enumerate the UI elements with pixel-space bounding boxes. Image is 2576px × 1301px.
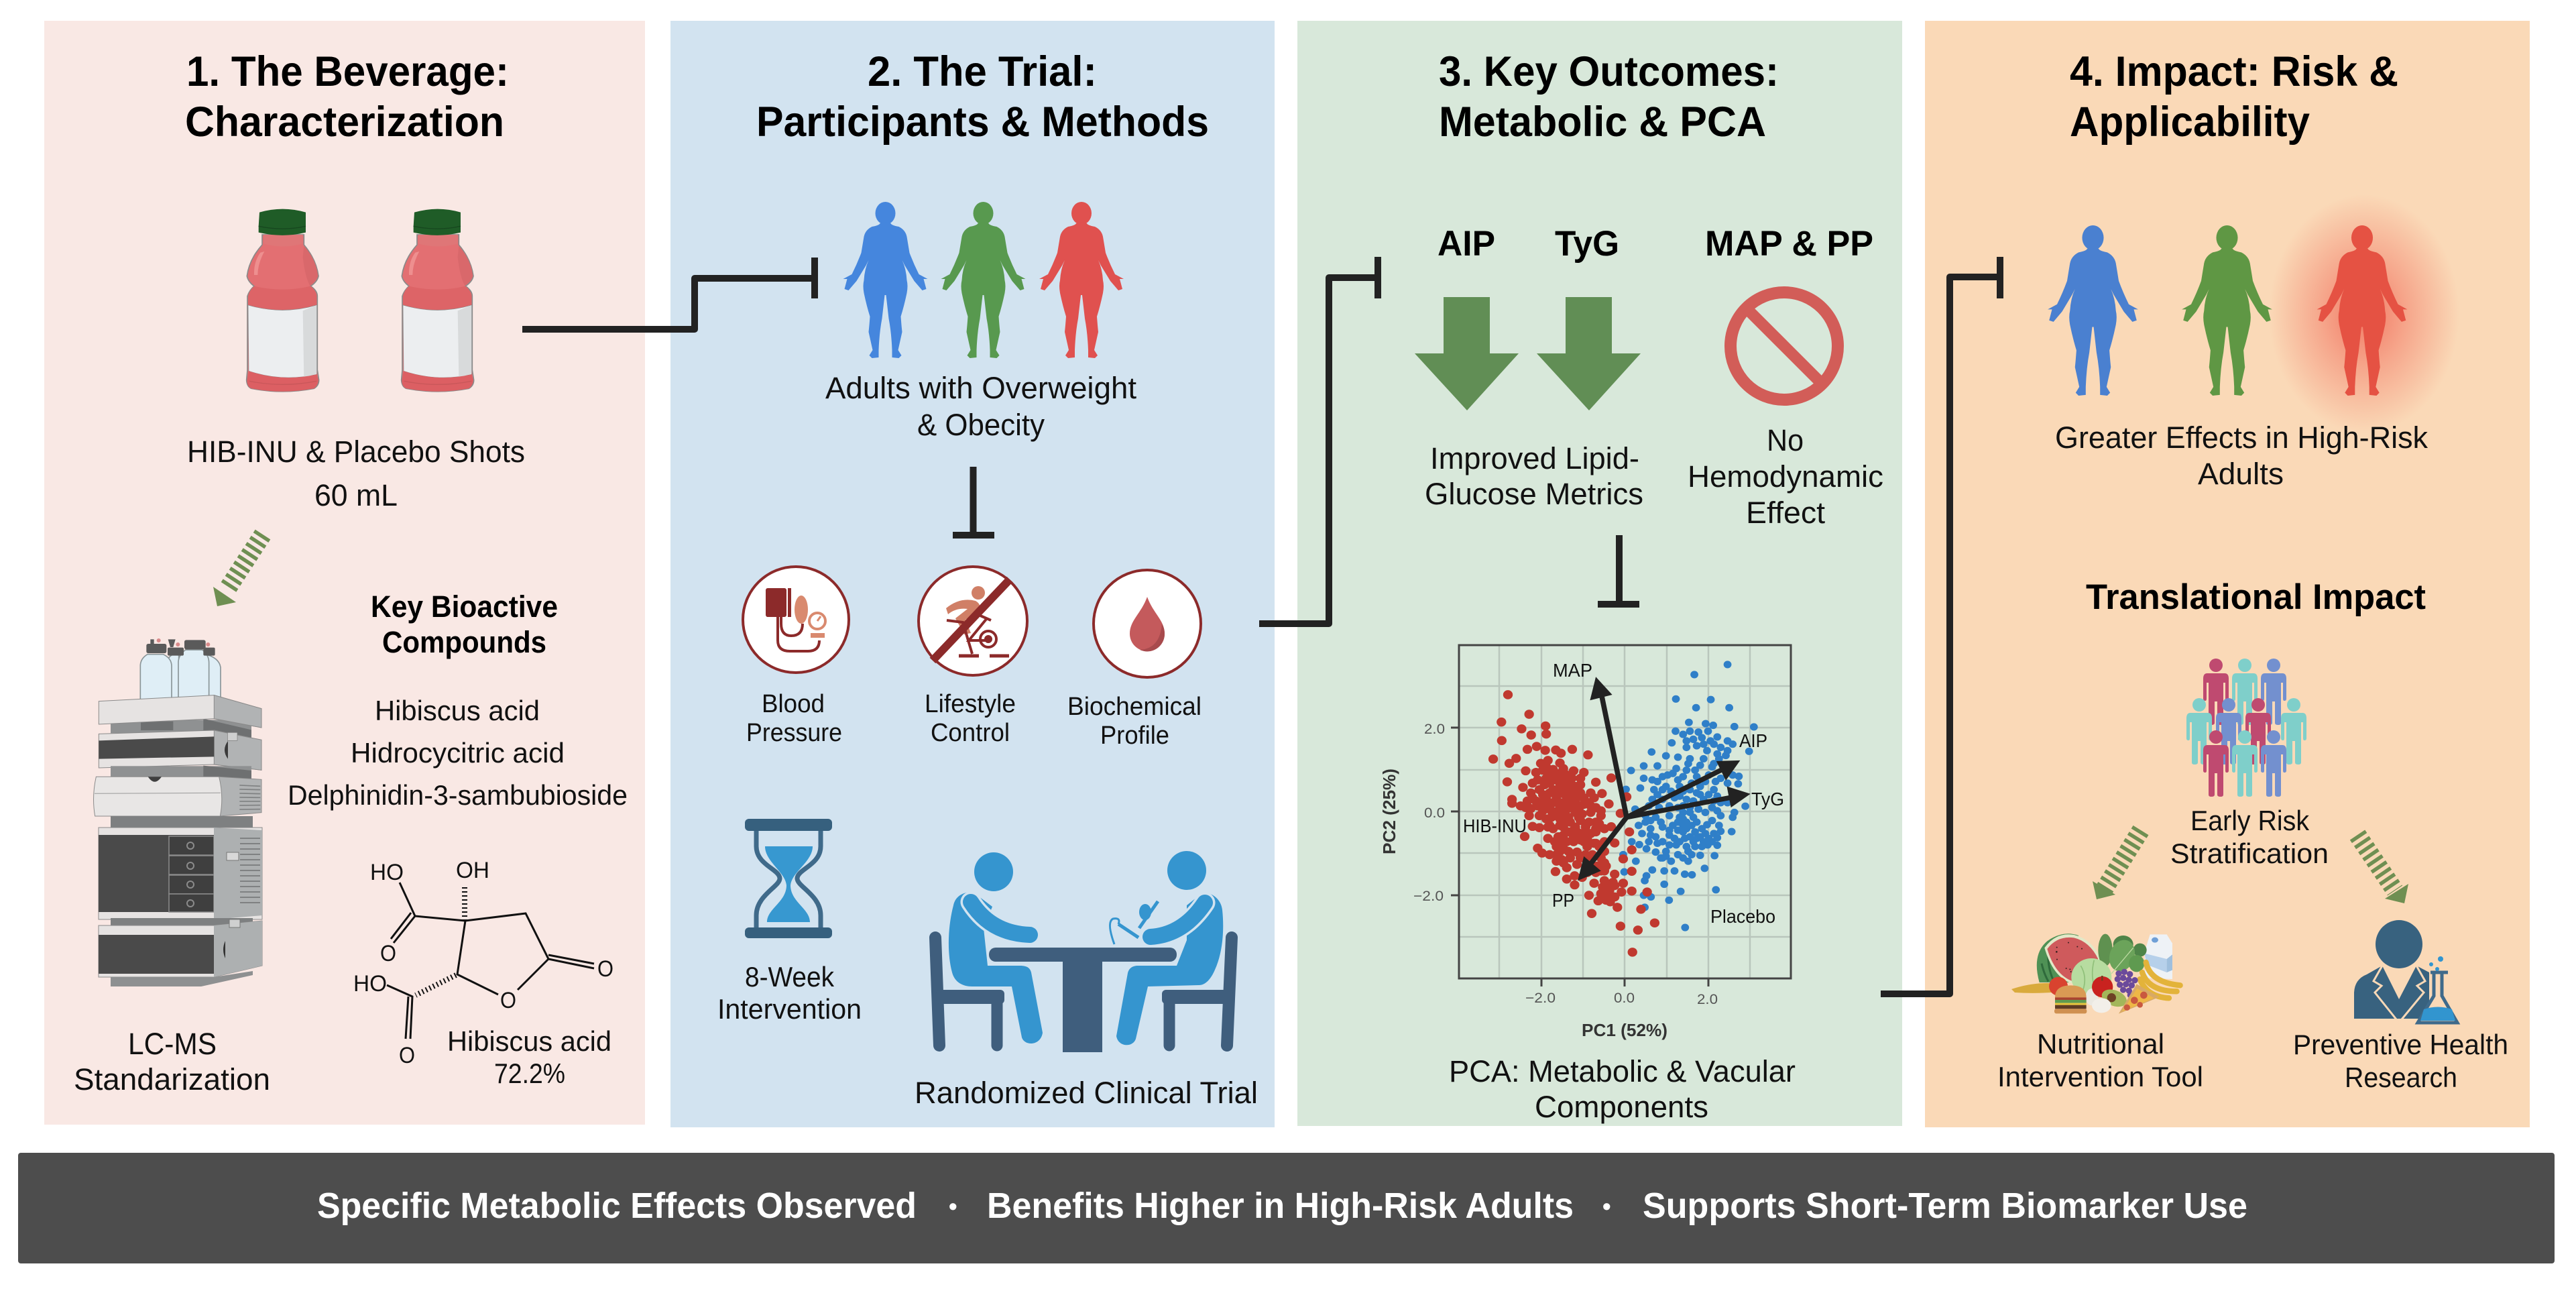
text: lifestyle label bbox=[925, 690, 1016, 747]
icon: health researcher with flask bbox=[2354, 920, 2457, 1023]
icon: clinical meeting scene bbox=[935, 851, 1233, 1052]
icon: healthy food group bbox=[2011, 934, 2180, 1014]
icon: shot bottle placebo bbox=[402, 209, 474, 392]
text: biochemical label: Biochemical bbox=[1067, 693, 1202, 721]
heading: key bioactive compounds bbox=[371, 589, 558, 659]
text: hibiscus acid percentage: Hibiscus acid bbox=[447, 1025, 611, 1057]
text: improved lipid glucose: Glucose Metrics bbox=[1425, 477, 1643, 511]
text: compound list: Hidrocycitric acid bbox=[351, 737, 565, 769]
text: participants bbox=[825, 371, 1136, 442]
text: no hemodynamic effect bbox=[1688, 423, 1883, 530]
icon: hibiscus acid molecule: O bbox=[597, 956, 613, 982]
text: x axis title: PC1 (52%) bbox=[1582, 1020, 1667, 1040]
text: blood pressure label bbox=[746, 690, 842, 747]
chart: blue placebo points bbox=[1623, 665, 1754, 927]
icon: hibiscus acid molecule: OH bbox=[456, 858, 489, 883]
text: early risk stratification: Early Risk bbox=[2190, 805, 2310, 836]
text: chart labels: PP bbox=[1552, 890, 1574, 911]
heading: translational impact: Translational Impact bbox=[2086, 577, 2426, 617]
icon: hourglass bbox=[745, 819, 832, 938]
icon: lifestyle control bbox=[919, 567, 1027, 675]
icon: blood drop bbox=[1094, 570, 1201, 677]
text: PCA caption bbox=[1449, 1054, 1796, 1124]
panel: impact bbox=[1925, 21, 2530, 1127]
text: axis tick labels: −2.0 bbox=[1525, 991, 1556, 1006]
text: randomized clinical trial: Randomized Clinical Trial bbox=[915, 1076, 1258, 1110]
icon: red glow high-risk bbox=[2269, 194, 2459, 433]
text: lifestyle label: Control bbox=[931, 719, 1010, 747]
text: nutritional tool bbox=[1997, 1028, 2203, 1092]
text: compound list: Delphinidin-3-sambubioside bbox=[288, 779, 628, 811]
text: preventive health research: Research bbox=[2345, 1062, 2457, 1093]
text: 8-week intervention bbox=[717, 961, 862, 1025]
text: axis tick labels bbox=[1413, 722, 1718, 1007]
panel: the trial bbox=[670, 21, 1275, 1127]
chart: PCA biplot bbox=[1379, 645, 1791, 1040]
text: blood pressure label: Blood bbox=[762, 690, 825, 718]
arrow: hatched to nutrition tool bbox=[2093, 830, 2141, 899]
text: 8-week intervention: Intervention bbox=[717, 993, 862, 1025]
text: participants: Adults with Overweight bbox=[825, 371, 1136, 405]
text: preventive health research bbox=[2293, 1029, 2508, 1093]
text: LC-MS label: Standarization bbox=[74, 1062, 270, 1096]
banner: key takeaways: • bbox=[949, 1192, 957, 1220]
text: axis tick labels: −2.0 bbox=[1413, 889, 1444, 904]
text: greater effects bbox=[2055, 420, 2428, 491]
icon: LC-MS instrument bbox=[94, 638, 262, 986]
text: PCA caption: PCA: Metabolic & Vacular bbox=[1449, 1054, 1796, 1088]
text: participants: & Obecity bbox=[917, 408, 1045, 442]
icon: hibiscus acid molecule: HO bbox=[353, 971, 387, 997]
text: nutritional tool: Intervention Tool bbox=[1997, 1061, 2203, 1092]
heading: panel 4 bbox=[2070, 48, 2398, 146]
heading: panel 4: Applicability bbox=[2070, 99, 2310, 146]
text: 8-week intervention: 8-Week bbox=[745, 961, 835, 993]
text: hibiscus acid percentage bbox=[447, 1025, 611, 1089]
arrow: connector trial to outcomes bbox=[1259, 257, 1381, 624]
text: chart labels: MAP bbox=[1553, 660, 1592, 681]
text: biochemical label: Profile bbox=[1100, 722, 1169, 750]
icon: hibiscus acid molecule: O bbox=[399, 1043, 415, 1068]
icon: no effect symbol bbox=[1731, 292, 1838, 400]
text: improved lipid glucose bbox=[1425, 441, 1643, 511]
text: greater effects: Adults bbox=[2198, 457, 2284, 491]
text: nutritional tool: Nutritional bbox=[2037, 1028, 2164, 1060]
text: lifestyle label: Lifestyle bbox=[925, 690, 1016, 718]
icon: blood pressure bbox=[743, 567, 849, 673]
arrow: T connector to PCA bbox=[1598, 535, 1639, 608]
text: y axis title: PC2 (25%) bbox=[1379, 769, 1399, 854]
heading: panel 2: 2. The Trial: bbox=[868, 48, 1097, 95]
icon: population group bbox=[2186, 659, 2306, 797]
heading: TyG: TyG bbox=[1555, 224, 1619, 264]
text: axis tick labels: 2.0 bbox=[1697, 992, 1718, 1007]
text: axis tick labels: 0.0 bbox=[1424, 805, 1445, 821]
icon: hibiscus acid molecule bbox=[353, 858, 613, 1068]
icon: three adult figures bbox=[843, 202, 1124, 358]
banner: key takeaways: Specific Metabolic Effects Observed bbox=[317, 1186, 917, 1226]
text: biochemical label bbox=[1067, 693, 1202, 750]
heading: panel 2: Participants & Methods bbox=[756, 99, 1209, 146]
icon: AIP down arrow bbox=[1415, 297, 1519, 410]
heading: AIP: AIP bbox=[1438, 224, 1495, 264]
heading: MAP and PP: MAP & PP bbox=[1705, 224, 1873, 264]
heading: panel 1: 1. The Beverage: bbox=[186, 48, 509, 95]
icon: three adult figures risk bbox=[2048, 225, 2407, 396]
banner: key takeaways bbox=[18, 1153, 2555, 1263]
text: greater effects: Greater Effects in High-Risk bbox=[2055, 420, 2428, 455]
arrow: T connector to measures bbox=[953, 467, 994, 539]
text: chart labels bbox=[1463, 660, 1784, 927]
text: LC-MS label: LC-MS bbox=[128, 1027, 217, 1061]
heading: key bioactive compounds: Key Bioactive bbox=[371, 589, 558, 624]
heading: panel 3 bbox=[1439, 48, 1779, 146]
heading: panel 1 bbox=[185, 48, 509, 146]
text: no hemodynamic effect: Hemodynamic bbox=[1688, 459, 1883, 494]
text: LC-MS label bbox=[74, 1027, 270, 1096]
heading: panel 3: Metabolic & PCA bbox=[1439, 99, 1766, 146]
arrow: connector beverage to trial bbox=[522, 258, 818, 329]
panel: the beverage bbox=[44, 21, 645, 1125]
text: chart labels: TyG bbox=[1751, 789, 1784, 809]
text: shots description: 60 mL bbox=[314, 478, 398, 512]
arrow: hatched to preventive research bbox=[2357, 835, 2408, 903]
heading: panel 1: Characterization bbox=[185, 99, 504, 146]
text: axis tick labels: 2.0 bbox=[1424, 722, 1445, 737]
text: hibiscus acid percentage: 72.2% bbox=[494, 1058, 565, 1089]
icon: TyG down arrow bbox=[1537, 297, 1641, 410]
text: compound list: Hibiscus acid bbox=[375, 695, 540, 726]
text: compound list bbox=[288, 695, 628, 811]
icon: hibiscus acid molecule: O bbox=[500, 988, 516, 1013]
heading: key bioactive compounds: Compounds bbox=[382, 625, 546, 659]
arrow: connector outcomes to impact bbox=[1881, 257, 2003, 994]
arrow: PCA loading vectors bbox=[1578, 677, 1751, 881]
banner: key takeaways: Supports Short-Term Biomarker Use bbox=[1643, 1186, 2247, 1226]
text: early risk stratification: Stratification bbox=[2170, 838, 2329, 869]
text: no hemodynamic effect: No bbox=[1767, 423, 1804, 457]
banner: key takeaways: • bbox=[1602, 1192, 1611, 1220]
text: chart labels: AIP bbox=[1739, 730, 1767, 751]
text: preventive health research: Preventive Health bbox=[2293, 1029, 2508, 1060]
text: improved lipid glucose: Improved Lipid- bbox=[1430, 441, 1639, 475]
text: chart labels: HIB-INU bbox=[1463, 815, 1527, 836]
heading: panel 2 bbox=[756, 48, 1209, 146]
icon: hibiscus acid molecule: O bbox=[380, 941, 396, 966]
text: chart labels: Placebo bbox=[1710, 906, 1775, 927]
text: blood pressure label: Pressure bbox=[746, 719, 842, 747]
icon: shot bottle HIB-INU bbox=[247, 209, 319, 392]
banner: key takeaways: Benefits Higher in High-Risk Adults bbox=[987, 1186, 1574, 1226]
heading: panel 4: 4. Impact: Risk & bbox=[2070, 48, 2398, 95]
text: early risk stratification bbox=[2170, 805, 2329, 869]
text: axis tick labels: 0.0 bbox=[1614, 991, 1635, 1006]
text: shots description: HIB-INU & Placebo Shots bbox=[187, 435, 525, 469]
text: shots description bbox=[187, 435, 525, 512]
arrow: hatched to LC-MS bbox=[213, 534, 263, 606]
heading: panel 3: 3. Key Outcomes: bbox=[1439, 48, 1779, 95]
text: no hemodynamic effect: Effect bbox=[1746, 496, 1825, 530]
chart: red HIB-INU points bbox=[1493, 695, 1655, 952]
icon: hibiscus acid molecule: HO bbox=[370, 860, 404, 885]
text: PCA caption: Components bbox=[1535, 1090, 1708, 1124]
panel: key outcomes bbox=[1297, 21, 1902, 1126]
